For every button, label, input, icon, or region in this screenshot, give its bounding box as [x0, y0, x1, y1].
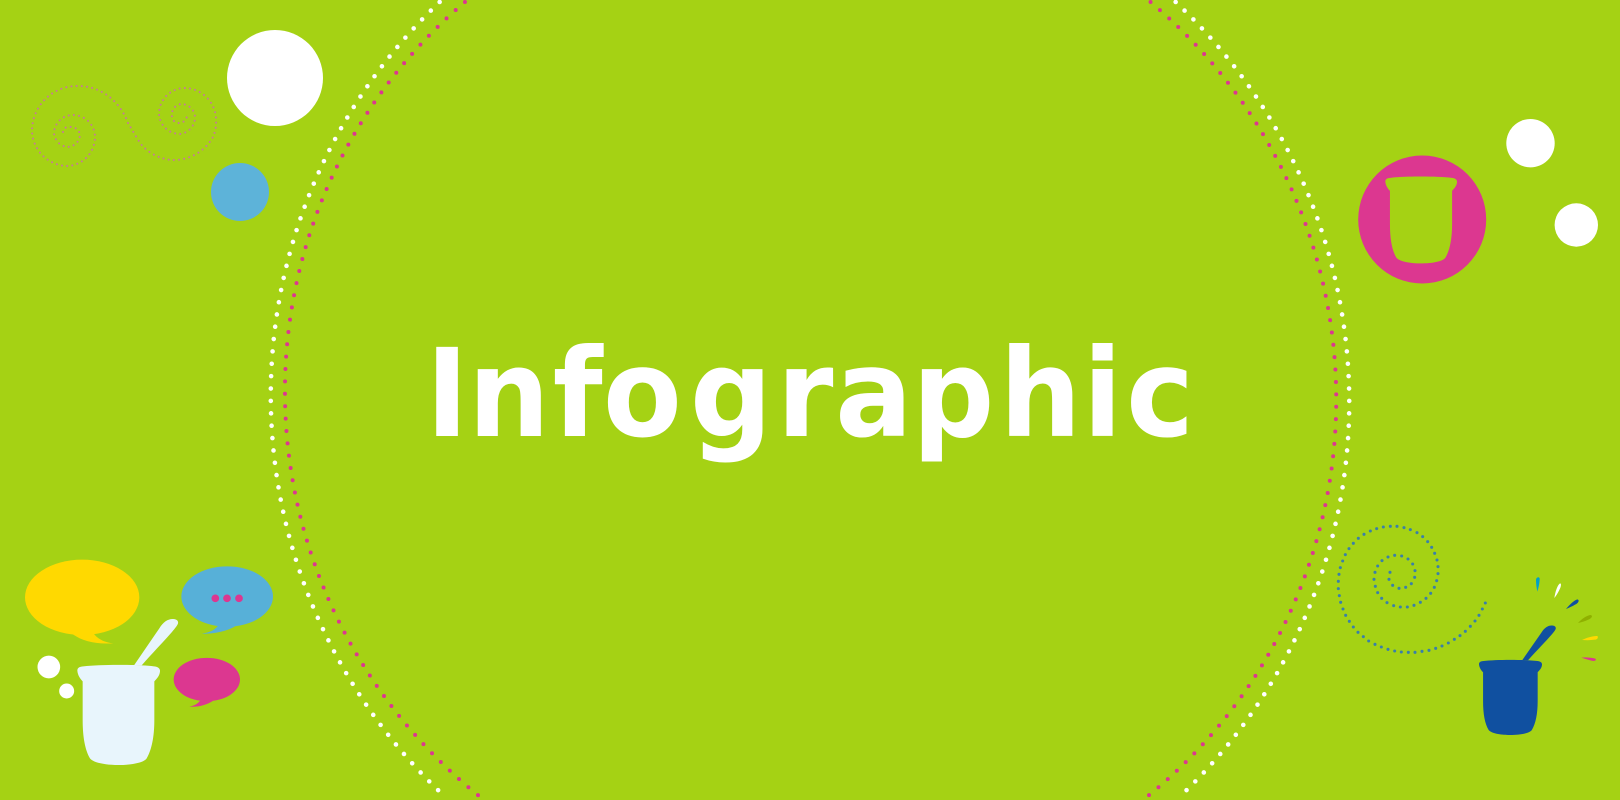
pink speech bubble [174, 658, 240, 707]
blue speech bubble [181, 566, 273, 634]
pink dotted double spiral [32, 86, 216, 166]
large white circle [227, 30, 323, 126]
white dotted ring [268, 2, 1352, 798]
colourful splash marks [1536, 577, 1598, 661]
yellow speech bubble [25, 560, 139, 644]
pink circle with cup icon [1358, 156, 1486, 284]
thought bubble dots [37, 656, 74, 698]
pink dotted ring [282, 2, 1340, 798]
title: Infographic [426, 323, 1194, 465]
ellipsis dots [211, 594, 243, 602]
blue circle [211, 163, 269, 221]
blue dotted spiral [1337, 525, 1487, 654]
dark blue cup with spoon [1479, 625, 1556, 735]
speech bubbles and white cup illustration [25, 560, 273, 765]
white cup with spoon [77, 619, 178, 765]
lower white circle [1555, 203, 1598, 247]
upper white circle [1506, 119, 1555, 167]
